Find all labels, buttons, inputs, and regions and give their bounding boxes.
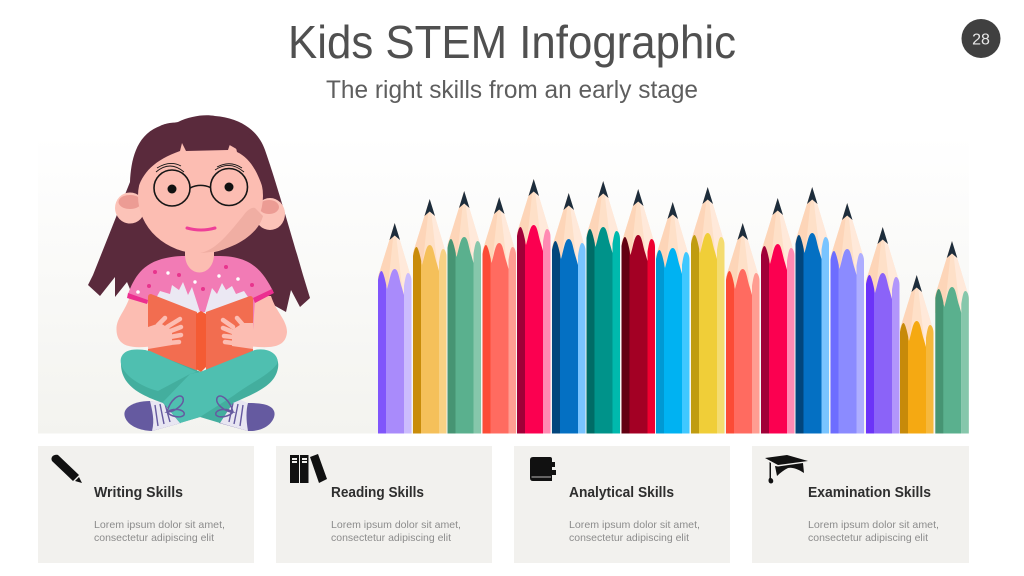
legs	[121, 349, 278, 423]
icon: pencil	[51, 455, 82, 483]
icon: graduation cap	[765, 455, 808, 484]
card: reading skills	[276, 446, 492, 563]
text block: Lorem ipsum dolor sit amet,	[808, 519, 939, 531]
page number badge: 28	[972, 32, 990, 48]
heading: Analytical Skills	[569, 485, 674, 501]
arms	[116, 296, 287, 347]
hands	[148, 318, 253, 349]
pencil: periwinkle	[830, 203, 864, 434]
pencil: dark red	[622, 189, 655, 434]
text block: consectetur adipiscing elit	[569, 532, 689, 544]
face	[138, 138, 263, 254]
text block: consectetur adipiscing elit	[331, 532, 451, 544]
shirt stars	[136, 271, 240, 294]
text block: consectetur adipiscing elit	[94, 532, 214, 544]
text block	[569, 519, 700, 544]
pencil: yellow	[691, 187, 724, 434]
heading: Reading Skills	[331, 485, 424, 501]
text block	[808, 519, 939, 544]
card: analytical skills	[514, 446, 730, 563]
girl reading a book	[88, 115, 310, 431]
shirt dots	[147, 265, 254, 291]
shoelace bows	[167, 396, 233, 417]
icon: books	[290, 454, 327, 483]
heading: Writing Skills	[94, 485, 183, 501]
pencil: green	[448, 191, 481, 434]
title: Kids STEM Infographic	[288, 16, 736, 68]
ears	[115, 192, 285, 230]
pencil: sky blue	[656, 202, 690, 434]
shoes	[124, 397, 275, 431]
neck	[185, 245, 214, 276]
text block: Lorem ipsum dolor sit amet,	[569, 519, 700, 531]
pencil: blue 2	[796, 187, 829, 434]
pencil: violet	[378, 223, 412, 434]
pencils group	[378, 179, 969, 434]
book spine	[196, 311, 206, 372]
mouth	[187, 228, 215, 230]
illustration backdrop	[38, 135, 969, 434]
face shadow	[200, 208, 263, 253]
pencil: teal	[586, 181, 620, 434]
pencil: orange	[900, 275, 934, 434]
bangs	[137, 124, 264, 192]
card: writing skills	[38, 446, 254, 563]
text block: Lorem ipsum dolor sit amet,	[94, 519, 225, 531]
sleeve bands	[127, 289, 274, 304]
hair	[88, 115, 310, 312]
shirt	[128, 256, 273, 330]
heading: Examination Skills	[808, 485, 931, 501]
pencil: crimson	[517, 179, 550, 434]
page number badge	[962, 19, 1000, 58]
book covers	[148, 294, 253, 372]
text block	[331, 519, 461, 544]
pencil: green 2	[935, 241, 969, 434]
pencil: coral 2	[726, 223, 760, 434]
pencil: blue	[552, 193, 586, 434]
card: examination skills	[752, 446, 969, 563]
icon: notebook	[530, 457, 556, 481]
book pages	[155, 282, 250, 316]
pencil: purple	[866, 227, 900, 434]
pencil: coral	[482, 197, 516, 434]
text block	[94, 519, 225, 544]
subtitle: The right skills from an early stage	[326, 76, 698, 104]
text block: Lorem ipsum dolor sit amet,	[331, 519, 461, 531]
glasses and eyes	[154, 163, 248, 206]
text block: consectetur adipiscing elit	[808, 532, 928, 544]
pencil: crimson 2	[761, 198, 794, 434]
pencil: amber	[413, 199, 446, 434]
